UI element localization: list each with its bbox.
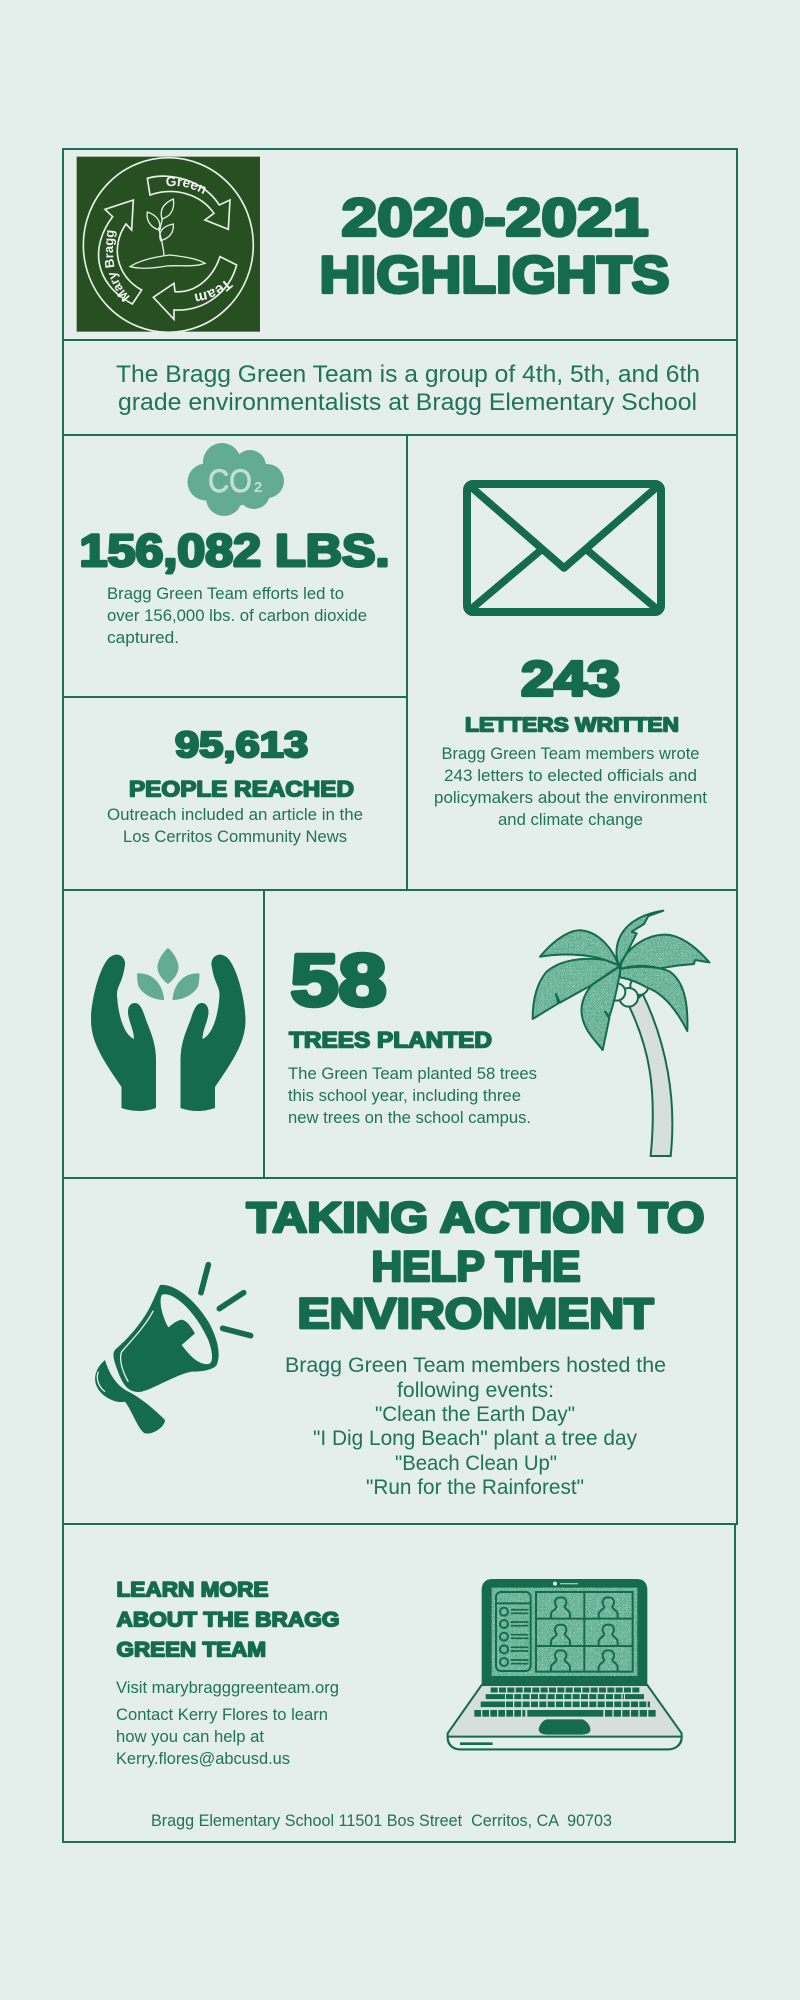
text: trees description: this school year, including three xyxy=(288,1087,521,1105)
heading: learn more: LEARN MORE xyxy=(116,1578,268,1602)
panel: carbon dioxide xyxy=(63,435,407,697)
text: contact details: Kerry.flores@abcusd.us xyxy=(116,1750,290,1768)
text: events list: "Run for the Rainforest" xyxy=(366,1476,584,1499)
logo: Mary Bragg Green Team: Team xyxy=(194,280,234,302)
text: contact details: Contact Kerry Flores to learn xyxy=(116,1706,328,1724)
text: trees description xyxy=(288,1065,537,1127)
icon: CO2 cloud: 2 xyxy=(254,479,262,496)
icon: envelope xyxy=(467,484,661,612)
text: CO2 description xyxy=(107,585,367,647)
icon: CO2 cloud xyxy=(188,443,284,516)
text: letters description: policymakers about the environment xyxy=(434,789,707,807)
title xyxy=(320,188,670,304)
text: trees description: The Green Team planted 58 trees xyxy=(288,1065,537,1083)
panel: intro text: grade environmentalists at Bragg Elementary School xyxy=(118,389,697,416)
text: letters description xyxy=(434,745,707,829)
panel: trees planted xyxy=(264,890,737,1178)
text: CO2 description: captured. xyxy=(107,629,179,647)
icon: laptop with video call xyxy=(448,1579,682,1749)
heading: taking action xyxy=(246,1195,704,1338)
icon: CO2 cloud: CO xyxy=(208,463,252,499)
icon: hands holding leaves xyxy=(91,948,246,1111)
text: CO2 description: Bragg Green Team efforts led to xyxy=(107,585,344,603)
stat: 95,613: 95,613 xyxy=(175,724,308,765)
text: outreach xyxy=(107,806,363,846)
text: trees description: new trees on the school campus. xyxy=(288,1109,531,1127)
text: contact details xyxy=(116,1679,339,1768)
heading: taking action: ENVIRONMENT xyxy=(298,1291,654,1338)
text: outreach: Los Cerritos Community News xyxy=(123,828,347,846)
text: letters description: Bragg Green Team members wrote xyxy=(442,745,700,763)
text: letters description: 243 letters to elected officials and xyxy=(444,767,697,785)
text: events list: Bragg Green Team members hosted the xyxy=(285,1354,666,1377)
text: school address: Bragg Elementary School 11501 Bos Street Cerritos, CA 90703 xyxy=(151,1812,612,1830)
panel: intro text xyxy=(63,340,737,435)
panel: learn more xyxy=(63,1524,735,1842)
text: events list: "I Dig Long Beach" plant a tree day xyxy=(313,1427,637,1450)
panel: letters written xyxy=(407,435,737,890)
logo: Mary Bragg Green Team xyxy=(76,156,260,332)
stat: 243: 243 xyxy=(521,652,620,706)
heading: trees planted: TREES PLANTED xyxy=(289,1028,492,1052)
panel: taking action xyxy=(63,1178,737,1524)
panel: hands icon xyxy=(63,890,264,1178)
panel: intro text: The Bragg Green Team is a group of 4th, 5th, and 6th xyxy=(116,361,700,388)
stat: 156,082 lbs: 156,082 LBS. xyxy=(80,525,390,576)
text: events list: following events: xyxy=(397,1379,554,1402)
icon: palm tree xyxy=(533,911,709,1156)
icon: megaphone xyxy=(95,1265,251,1434)
logo: Mary Bragg Green Team: Green xyxy=(166,177,206,194)
heading: learn more: GREEN TEAM xyxy=(116,1638,266,1662)
panel: people reached xyxy=(63,697,407,890)
panel: header xyxy=(62,148,738,339)
heading: learn more: ABOUT THE BRAGG xyxy=(116,1608,340,1632)
heading: taking action: TAKING ACTION TO xyxy=(246,1195,704,1242)
title: 2020-2021 xyxy=(342,188,648,248)
heading: learn more xyxy=(116,1578,340,1662)
text: contact details: how you can help at xyxy=(116,1728,264,1746)
heading: people reached: PEOPLE REACHED xyxy=(129,776,354,802)
text: contact details: Visit marybragggreenteam.org xyxy=(116,1679,339,1697)
logo: Mary Bragg Green Team: Mary Bragg xyxy=(104,230,130,302)
text: outreach: Outreach included an article in the xyxy=(107,806,363,824)
stat: 58: 58 xyxy=(290,940,386,1022)
text: events list: "Beach Clean Up" xyxy=(395,1452,557,1475)
text: CO2 description: over 156,000 lbs. of carbon dioxide xyxy=(107,607,367,625)
title: HIGHLIGHTS xyxy=(320,246,670,304)
text: letters description: and climate change xyxy=(498,811,643,829)
heading: letters written: LETTERS WRITTEN xyxy=(465,714,679,736)
heading: taking action: HELP THE xyxy=(372,1244,580,1291)
text: events list xyxy=(285,1354,666,1499)
text: events list: "Clean the Earth Day" xyxy=(375,1403,575,1426)
